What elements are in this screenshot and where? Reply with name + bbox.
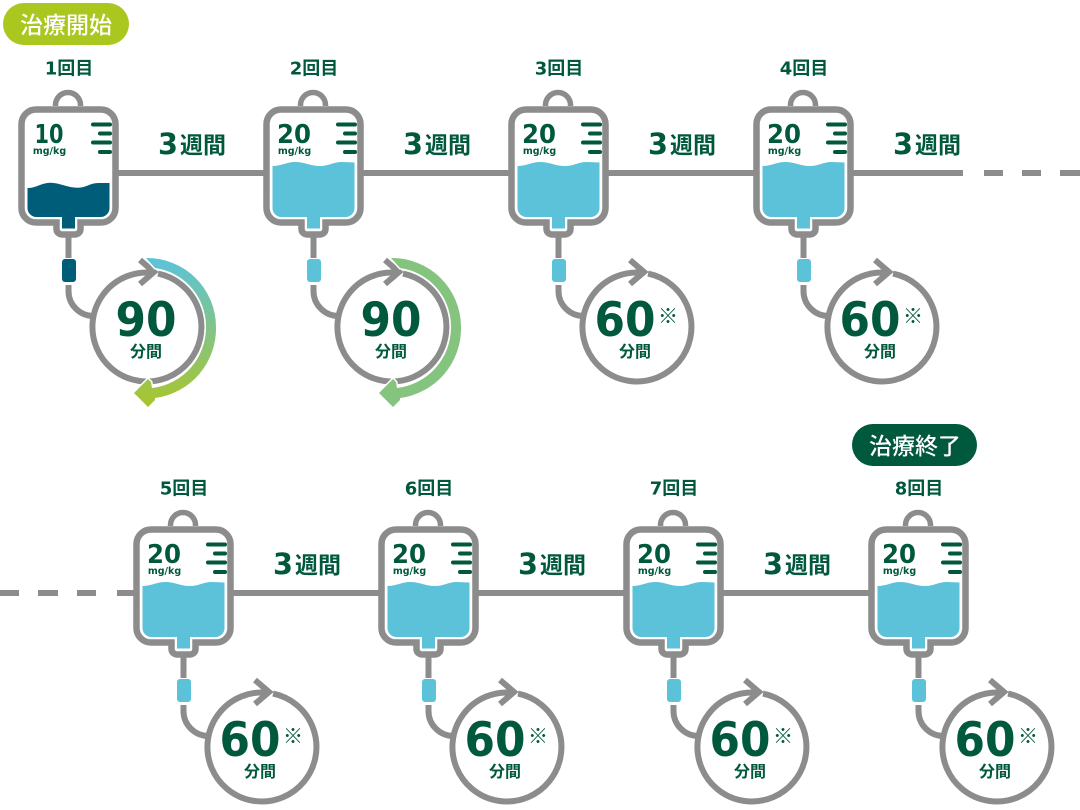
dose: mg/kg [393, 566, 426, 577]
scale ticks [208, 544, 225, 572]
icon: IV bag [512, 92, 606, 258]
duration [840, 293, 923, 362]
dose: 10 [34, 120, 64, 150]
duration: ※ [283, 720, 303, 749]
drip chamber [307, 259, 321, 282]
dose: mg/kg [883, 566, 916, 577]
duration: 分間 [864, 338, 896, 362]
timer circle [314, 260, 446, 381]
interval 1: 週間 [180, 126, 226, 160]
dose: 20 [522, 120, 556, 150]
liquid [388, 582, 470, 648]
session 7 [626, 478, 806, 801]
treatment start badge: 治療開始 [20, 6, 112, 40]
icon: IV bag [136, 512, 230, 678]
scale ticks [93, 124, 110, 152]
scale ticks [698, 544, 715, 572]
connector line: row 2 [0, 590, 872, 596]
duration: 90 [116, 293, 176, 348]
interval 6: 3 [518, 547, 538, 581]
duration: 分間 [489, 758, 521, 782]
timer circle [558, 260, 691, 381]
session label: 4回目 [780, 58, 828, 80]
session label: 6回目 [405, 478, 453, 500]
dose: 20 [767, 120, 801, 150]
interval 7: 週間 [785, 546, 831, 580]
duration: 90 [360, 293, 422, 348]
interval 5: 3 [273, 547, 293, 581]
timer circle [184, 680, 316, 801]
duration [220, 713, 303, 782]
liquid [762, 162, 844, 228]
timer circle [68, 260, 201, 381]
white bag backing [871, 529, 966, 643]
duration: 60 [954, 713, 1016, 768]
dose [33, 120, 66, 157]
duration: 60 [464, 713, 526, 768]
interval 4: 3 [893, 127, 913, 161]
dose: mg/kg [148, 566, 181, 577]
duration: 60 [594, 293, 656, 348]
drip chamber [552, 259, 566, 282]
liquid [272, 162, 354, 228]
duration [710, 713, 793, 782]
treatment end badge [852, 424, 977, 466]
session 2 [266, 58, 461, 407]
liquid [878, 582, 960, 648]
timer circle [918, 680, 1051, 801]
dose: mg/kg [638, 566, 671, 577]
90 minute arrow [134, 258, 216, 407]
liquid [518, 162, 600, 228]
white bag backing [381, 529, 476, 643]
duration: 分間 [979, 758, 1011, 782]
duration: ※ [773, 720, 793, 749]
icon: IV bag [626, 512, 720, 678]
drip chamber [912, 679, 926, 702]
dose: 20 [882, 540, 916, 570]
drip chamber [667, 679, 681, 702]
session label: 5回目 [160, 478, 208, 500]
dose: 20 [147, 540, 181, 570]
icon: IV bag [872, 512, 966, 678]
duration: 分間 [375, 338, 407, 362]
session label: 2回目 [290, 58, 338, 80]
interval 5 [273, 546, 341, 581]
dose: mg/kg [33, 146, 66, 157]
duration: ※ [528, 720, 548, 749]
duration: 60 [840, 293, 900, 348]
session 5 [136, 478, 316, 801]
duration: 分間 [130, 338, 162, 362]
timer circle [804, 260, 936, 381]
drip chamber [62, 259, 76, 282]
dose: 20 [637, 540, 671, 570]
session 4 [756, 58, 936, 381]
duration: ※ [903, 300, 923, 329]
white bag backing [136, 529, 231, 643]
white bag backing [756, 109, 851, 223]
session 3 [511, 58, 691, 381]
interval 2: 3 [403, 127, 423, 161]
duration [594, 293, 678, 362]
duration: 分間 [619, 338, 651, 362]
duration: 分間 [244, 758, 276, 782]
dose: mg/kg [278, 146, 311, 157]
liquid [632, 582, 714, 648]
treatment start badge [3, 3, 129, 45]
duration: ※ [658, 300, 678, 329]
session label: 3回目 [535, 58, 583, 80]
scale ticks [583, 124, 600, 152]
white bag backing [266, 109, 361, 223]
session 6 [381, 478, 561, 801]
session 1 [21, 58, 216, 407]
white bag backing [511, 109, 606, 223]
duration: 分間 [734, 758, 766, 782]
dose: mg/kg [768, 146, 801, 157]
dose: 20 [392, 540, 426, 570]
session 8 [871, 478, 1051, 801]
white bag backing [21, 109, 116, 223]
90 minute arrow [379, 258, 461, 407]
icon: IV bag [21, 92, 115, 258]
timer circle [428, 680, 561, 801]
interval 4 [893, 126, 961, 161]
dose: 20 [277, 120, 311, 150]
drip chamber [422, 679, 436, 702]
scale ticks [453, 544, 470, 572]
interval 1: 3 [158, 127, 178, 161]
connector line: row 1 [118, 170, 1080, 176]
interval 6: 週間 [540, 546, 586, 580]
interval 3: 週間 [670, 126, 716, 160]
timer circle [674, 680, 806, 801]
duration: 60 [220, 713, 280, 768]
session label: 8回目 [895, 478, 943, 500]
scale ticks [338, 124, 355, 152]
duration: 60 [710, 713, 770, 768]
drip chamber [177, 679, 191, 702]
interval 3: 3 [648, 127, 668, 161]
interval 2 [403, 126, 471, 161]
duration: ※ [1018, 720, 1038, 749]
white bag backing [626, 529, 721, 643]
icon: IV bag [756, 92, 850, 258]
session label: 7回目 [650, 478, 698, 500]
interval 7 [763, 546, 831, 581]
interval 2: 週間 [425, 126, 471, 160]
icon: IV bag [266, 92, 360, 258]
treatment end badge: 治療終了 [869, 427, 961, 461]
duration [464, 713, 548, 782]
scale ticks [828, 124, 845, 152]
scale ticks [943, 544, 960, 572]
interval 7: 3 [763, 547, 783, 581]
interval 1 [158, 126, 226, 161]
dose: mg/kg [523, 146, 556, 157]
liquid [28, 183, 110, 228]
liquid [142, 582, 224, 648]
icon: IV bag [382, 512, 476, 678]
duration [954, 713, 1038, 782]
interval 3 [648, 126, 716, 161]
session label: 1回目 [45, 58, 93, 80]
interval 6 [518, 546, 586, 581]
interval 5: 週間 [295, 546, 341, 580]
interval 4: 週間 [915, 126, 961, 160]
drip chamber [797, 259, 811, 282]
